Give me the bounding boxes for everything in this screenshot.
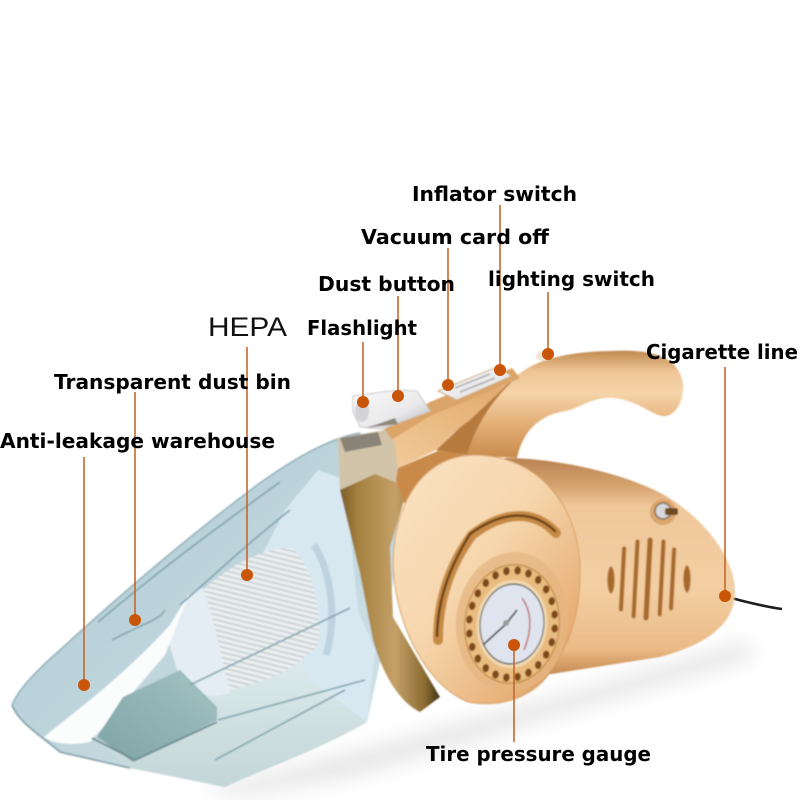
label: HEPA xyxy=(208,312,287,581)
vacuum cleaner product xyxy=(12,351,735,787)
floor shadow xyxy=(200,640,750,796)
label: Dust button: Dust button xyxy=(318,272,455,296)
rear speaker grille xyxy=(607,537,691,621)
label: Vacuum card off: Vacuum card off xyxy=(361,225,549,249)
dust button and flashlight housing xyxy=(353,390,430,429)
label: Transparent dust bin: Transparent dust bin xyxy=(54,370,291,394)
label: Inflator switch: Inflator switch xyxy=(412,182,577,206)
label: Dust button xyxy=(318,272,455,402)
label: Flashlight xyxy=(307,316,417,408)
label: lighting switch xyxy=(488,267,655,360)
label: HEPA: HEPA xyxy=(208,312,287,342)
top deck rail xyxy=(378,368,520,442)
pleated HEPA filter xyxy=(203,548,319,690)
gold latch band xyxy=(340,474,440,712)
top clip of bin xyxy=(338,430,408,490)
dust block xyxy=(97,670,217,762)
transparent dust bin xyxy=(12,433,400,787)
pale inner wall near body xyxy=(262,470,375,722)
lighting switch button xyxy=(536,351,550,361)
curved vent slot xyxy=(437,516,556,640)
tire pressure gauge xyxy=(449,547,575,697)
clear ridges xyxy=(98,482,365,760)
canister rim xyxy=(12,433,360,705)
power cord xyxy=(700,594,782,609)
filter collar xyxy=(168,588,230,696)
handle shadow triangle xyxy=(436,382,512,455)
front disc xyxy=(393,455,580,704)
rear motor body xyxy=(500,458,735,675)
lower translucent area xyxy=(100,620,367,787)
white glare streak xyxy=(44,592,190,744)
label: Flashlight: Flashlight xyxy=(307,316,417,340)
label: lighting switch: lighting switch xyxy=(488,267,655,291)
label: Anti-leakage warehouse xyxy=(0,429,275,691)
label: Cigarette line: Cigarette line xyxy=(646,340,798,364)
label: Transparent dust bin xyxy=(54,370,291,626)
label: Vacuum card off xyxy=(361,225,549,391)
handle xyxy=(467,351,683,458)
label: Tire pressure gauge: Tire pressure gauge xyxy=(426,742,651,766)
label: Inflator switch xyxy=(412,182,577,376)
shoulder between deck and disc xyxy=(396,450,470,505)
vacuum switch and inflator switch xyxy=(438,367,512,400)
top deck panel xyxy=(388,384,508,468)
label: Cigarette line xyxy=(646,340,798,602)
air valve xyxy=(650,499,678,525)
label: Anti-leakage warehouse: Anti-leakage warehouse xyxy=(0,429,275,453)
label: Tire pressure gauge xyxy=(426,639,651,766)
